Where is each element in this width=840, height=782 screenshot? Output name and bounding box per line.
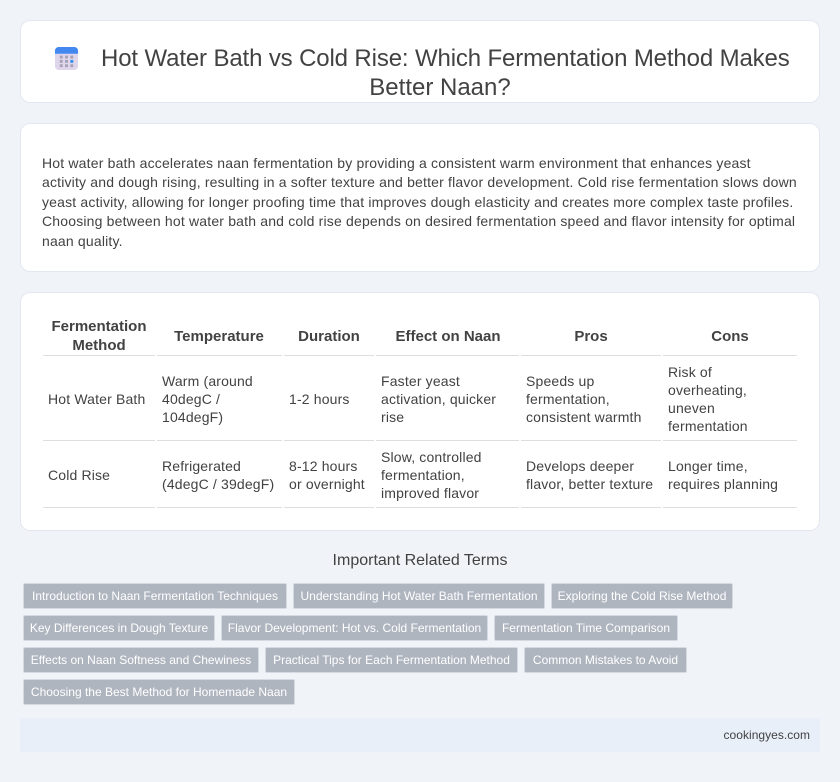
- row: hot water bath: 40degC /: [162, 391, 220, 407]
- related term tags: Common Mistakes to Avoid: [533, 653, 678, 667]
- row: cold rise: improved flavor: [381, 485, 479, 501]
- title: Hot Water Bath vs Cold Rise: Which Fermentation Method Makes: [101, 45, 790, 72]
- related term tags: Introduction to Naan Fermentation Techniques: [32, 589, 278, 603]
- row: hot water bath: rise: [381, 409, 404, 425]
- table header: [51, 318, 749, 354]
- row: cold rise: flavor, better texture: [526, 476, 653, 492]
- title: [101, 45, 790, 101]
- row: cold rise: Slow, controlled: [381, 449, 482, 465]
- related term tags: Practical Tips for Each Fermentation Method: [273, 653, 510, 667]
- row: cold rise: fermentation,: [381, 467, 465, 483]
- comparison table: [43, 318, 797, 508]
- row: hot water bath: Faster yeast: [381, 373, 460, 389]
- row: hot water bath: overheating,: [668, 382, 747, 398]
- related term tags: Choosing the Best Method for Homemade Naan: [31, 685, 287, 699]
- row: cold rise: requires planning: [668, 476, 778, 492]
- related term tags: Effects on Naan Softness and Chewiness: [31, 653, 251, 667]
- related term tags: Key Differences in Dough Texture: [30, 621, 208, 635]
- intro paragraph: yeast activity, allowing for longer proofing time that improves dough elasticity and creates more complex taste profiles.: [42, 194, 793, 210]
- row: cold rise: Longer time,: [668, 458, 748, 474]
- row: hot water bath: Warm (around: [162, 373, 253, 389]
- row: cold rise: [48, 449, 778, 501]
- row: hot water bath: 104degF): [162, 409, 223, 425]
- related term tags: [23, 583, 733, 705]
- row: hot water bath: Hot Water Bath: [48, 391, 145, 407]
- intro paragraph: Hot water bath accelerates naan fermentation by providing a consistent warm environment that enhances yeast: [42, 155, 751, 171]
- row: hot water bath: 1-2 hours: [289, 391, 350, 407]
- related term tags: Fermentation Time Comparison: [502, 621, 670, 635]
- table header: Temperature: [174, 328, 264, 345]
- icon: calendar: [54, 47, 78, 70]
- table header: Duration: [298, 328, 360, 345]
- intro paragraph: [42, 155, 797, 249]
- intro paragraph: naan quality.: [42, 233, 123, 249]
- row: cold rise: 8-12 hours: [289, 458, 358, 474]
- table header: Fermentation: [51, 318, 147, 335]
- row: hot water bath: fermentation: [668, 418, 748, 434]
- heading: related terms: Important Related Terms: [333, 552, 507, 569]
- row: cold rise: (4degC / 39degF): [162, 476, 274, 492]
- intro paragraph: activity and dough rising, resulting in a softer texture and better flavor development. Cold rise fermentation slows down: [42, 174, 797, 190]
- row: hot water bath: [48, 364, 748, 434]
- footer bar: [20, 718, 820, 752]
- table header: Effect on Naan: [395, 328, 501, 345]
- related term tags: Exploring the Cold Rise Method: [558, 589, 726, 603]
- row: hot water bath: uneven: [668, 400, 715, 416]
- row: cold rise: Cold Rise: [48, 467, 110, 483]
- table header: Pros: [574, 328, 608, 345]
- table header: Cons: [711, 328, 749, 345]
- row: cold rise: or overnight: [289, 476, 365, 492]
- row: hot water bath: Risk of: [668, 364, 712, 380]
- row: hot water bath: activation, quicker: [381, 391, 496, 407]
- row: hot water bath: fermentation,: [526, 391, 610, 407]
- table header: Method: [72, 337, 126, 354]
- row: cold rise: Develops deeper: [526, 458, 634, 474]
- title: Better Naan?: [369, 74, 511, 101]
- panel: intro text: [20, 123, 820, 272]
- row: hot water bath: Speeds up: [526, 373, 594, 389]
- row: cold rise: Refrigerated: [162, 458, 241, 474]
- panel: header: [20, 20, 820, 103]
- panel: comparison table: [20, 292, 820, 531]
- related term tags: Flavor Development: Hot vs. Cold Fermentation: [228, 621, 481, 635]
- related term tags: Understanding Hot Water Bath Fermentation: [300, 589, 538, 603]
- intro paragraph: Choosing between hot water bath and cold rise depends on desired fermentation speed and flavor intensity for optimal: [42, 213, 795, 229]
- row: hot water bath: consistent warmth: [526, 409, 642, 425]
- source credit: cookingyes.com: [724, 728, 810, 742]
